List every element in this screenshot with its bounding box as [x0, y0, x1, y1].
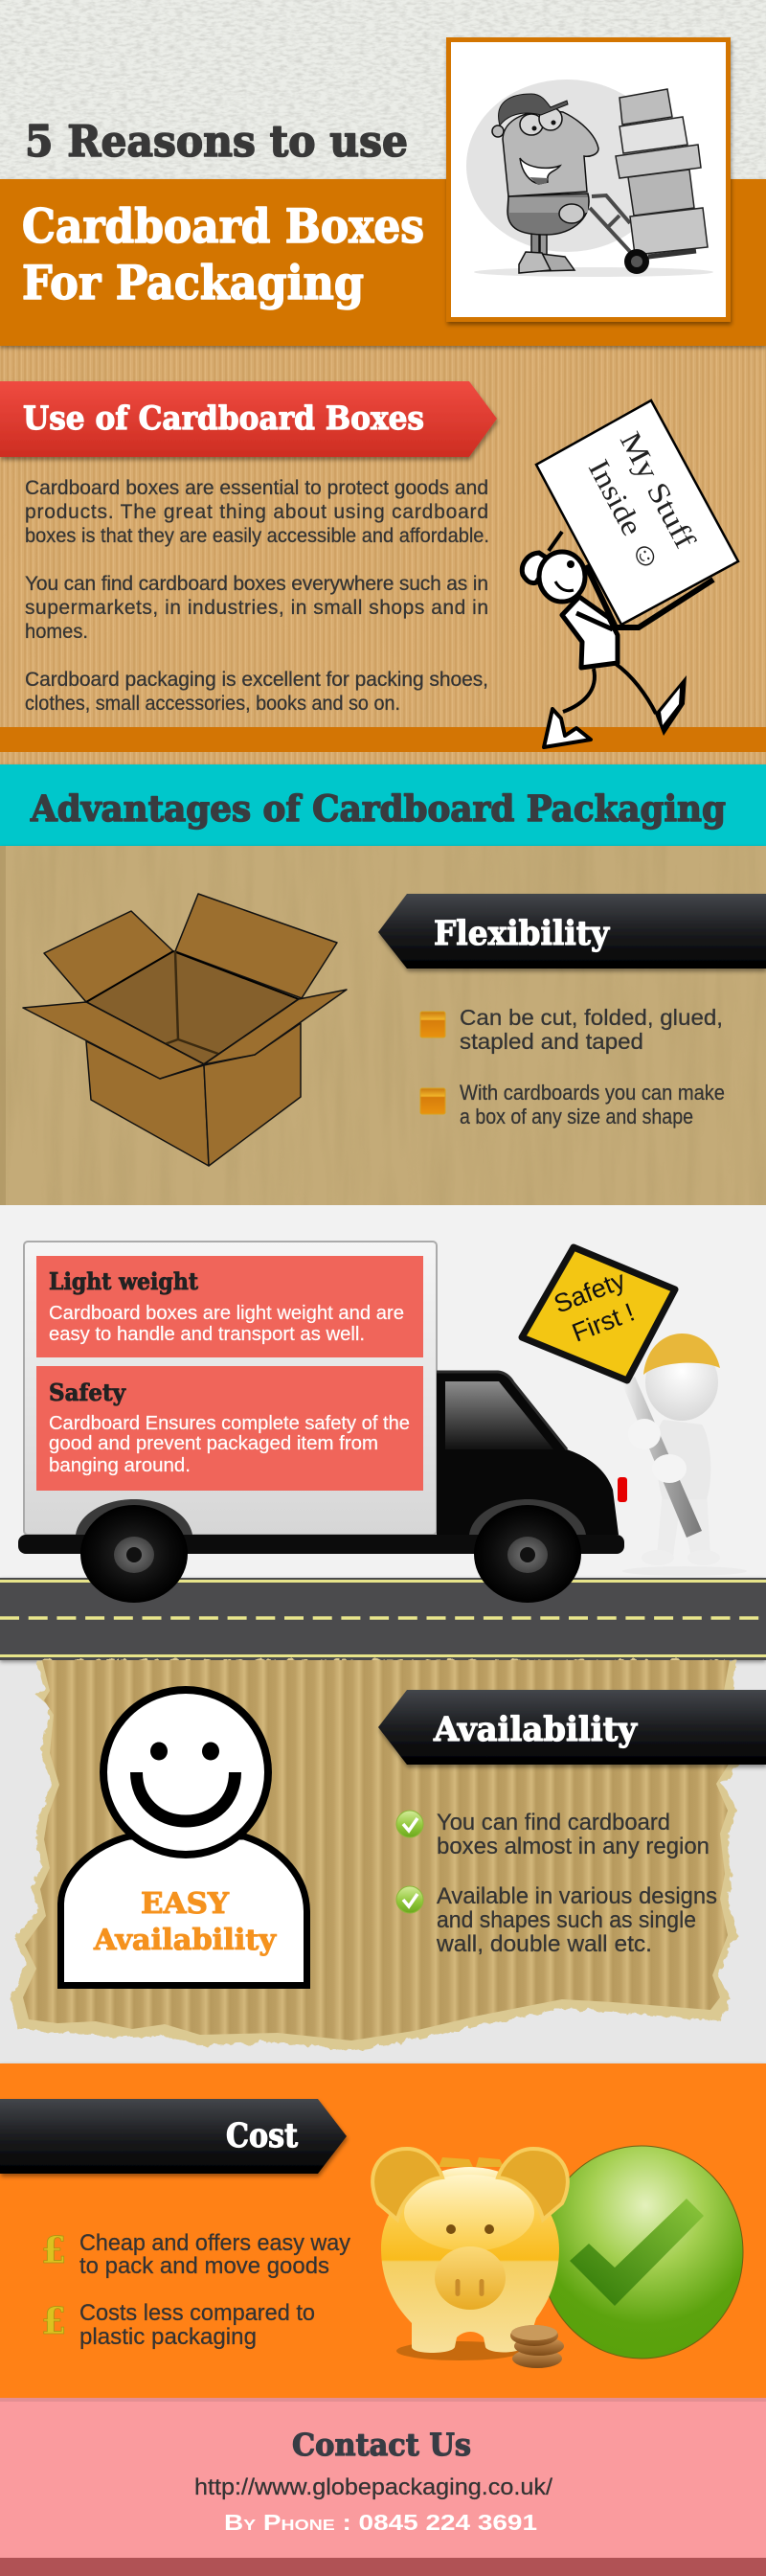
text: availability bullet two: wall, double wall etc. [436, 1931, 652, 1957]
left leg [563, 669, 595, 712]
floor shadow [622, 1566, 747, 1576]
illustration: worker holding safety sign [522, 1247, 747, 1576]
text: availability bullet one: You can find cardboard [437, 1810, 670, 1835]
banner: Advantages of Cardboard Packaging: Advantages of Cardboard Packaging [30, 787, 726, 830]
heading: Contact Us: Contact Us [292, 2427, 471, 2463]
floor shadow [474, 267, 713, 277]
picture: delivery man with hand truck [446, 37, 731, 322]
panel: header background [0, 0, 766, 182]
text: cost bullet two: Costs less compared to [79, 2300, 315, 2326]
text: flexibility bullet two: With cardboards you can make [460, 1081, 725, 1105]
panel: cost [0, 2063, 766, 2398]
panel: orange title band [0, 179, 766, 346]
text: cost bullet one: to pack and move goods [79, 2253, 329, 2279]
text: easy availability [93, 1887, 278, 1957]
card: safety: good and prevent packaged item from [49, 1433, 378, 1454]
illustration: delivery truck [18, 1242, 627, 1603]
pencil on cap [549, 532, 562, 551]
banner: Cost: Cost [226, 2116, 298, 2155]
legs [657, 1490, 710, 1557]
text: cost bullet two: plastic packaging [79, 2324, 257, 2350]
banner: Use of Cardboard Boxes [0, 381, 497, 457]
text block: use of cardboard boxes paragraphs: products. The great thing about using cardboard [25, 501, 488, 523]
torso [562, 597, 618, 668]
heading: Cardboard Boxes For Packaging [22, 198, 424, 310]
feet [642, 1550, 720, 1565]
text: availability bullet one [437, 1810, 710, 1859]
cap [522, 553, 551, 583]
text: flexibility bullet two: a box of any size and shape [460, 1105, 693, 1128]
text: flexibility bullet one: Can be cut, folded, glued, [460, 1005, 723, 1030]
sign [522, 1247, 675, 1380]
sign: First ! [568, 1298, 639, 1348]
cargo box [24, 1242, 437, 1535]
panel: section use of cardboard boxes background [0, 346, 766, 767]
hand [559, 204, 584, 223]
text: flexibility bullet one [460, 1005, 723, 1054]
chassis [18, 1535, 624, 1554]
panel: torn cardboard sheet [11, 1660, 766, 2050]
icon: piggy bank [372, 2149, 568, 2360]
text: cost bullet one [79, 2230, 350, 2279]
card: safety: banging around. [49, 1455, 191, 1476]
tail light [618, 1477, 627, 1502]
text block: use of cardboard boxes paragraphs: Cardboard boxes are essential to protect goods and [25, 477, 488, 499]
card: safety: Cardboard Ensures complete safety of the [49, 1413, 410, 1434]
hands [628, 1419, 687, 1483]
stripe: orange floor [0, 727, 766, 752]
banner: Advantages of Cardboard Packaging [0, 764, 766, 846]
panel: grey availability background [0, 1660, 766, 2067]
text: availability bullet one: boxes almost in any region [437, 1834, 710, 1859]
icon: green check two [396, 1886, 423, 1913]
icon: pound bullet two: £ [41, 2299, 66, 2342]
card shadow [586, 565, 713, 627]
mouth [520, 158, 560, 184]
card with message [536, 400, 738, 625]
banner: Use of Cardboard Boxes: Use of Cardboard Boxes [23, 399, 424, 438]
text: easy availability: Availability [93, 1924, 278, 1957]
text: flexibility bullet one: stapled and taped [460, 1029, 643, 1054]
text: cost bullet one: Cheap and offers easy way [79, 2230, 350, 2256]
card with message: My Stuff [614, 426, 703, 555]
text: cost bullet two [79, 2300, 315, 2350]
icon: crate bullet [420, 1012, 445, 1037]
cab [437, 1372, 619, 1535]
cap [499, 94, 568, 125]
heading: Cardboard Boxes For Packaging: Cardboard Boxes [22, 198, 424, 254]
cab window [445, 1381, 553, 1449]
heading: Cardboard Boxes For Packaging: For Packaging [22, 255, 364, 310]
footer strip [0, 2558, 766, 2576]
sign: Safety [550, 1265, 630, 1319]
eyes [150, 1742, 219, 1761]
card: light weight: Light weight [49, 1267, 198, 1295]
banner: Cost [0, 2099, 347, 2174]
banner: Availability [378, 1690, 766, 1765]
text: website url: http://www.globepackaging.co.uk/ [194, 2474, 552, 2500]
icon: green check [396, 1811, 423, 1837]
illustration: stick figure carrying box [522, 400, 738, 747]
text block: use of cardboard boxes paragraphs: homes. [25, 621, 88, 643]
road [0, 1578, 766, 1660]
grey backdrop circle [466, 80, 667, 252]
panel: contact [0, 2398, 766, 2558]
card: safety [36, 1366, 423, 1491]
icon: coin stack [510, 2325, 564, 2368]
stacked boxes [616, 89, 708, 255]
head and torso [492, 125, 504, 137]
right leg [616, 664, 656, 714]
legs and shoes [519, 230, 574, 273]
text: easy availability: EASY [141, 1887, 230, 1921]
card: light weight: Cardboard boxes are light weight and are [49, 1303, 404, 1324]
banner: Flexibility: Flexibility [434, 914, 611, 953]
text: availability bullet two [436, 1883, 717, 1957]
text block: use of cardboard boxes paragraphs [25, 477, 489, 715]
card: light weight: easy to handle and transport as well. [49, 1324, 365, 1345]
head [539, 552, 585, 602]
wheel left [76, 1499, 192, 1603]
head [103, 1690, 268, 1855]
torso [656, 1420, 710, 1499]
figure: smiling person [61, 1690, 306, 1985]
eyes [520, 114, 543, 135]
text block: use of cardboard boxes paragraphs: Cardboard packaging is excellent for packing shoes, [25, 669, 488, 691]
icon: pound bullet: £ [41, 2228, 66, 2271]
pole [621, 1377, 702, 1538]
text block: use of cardboard boxes paragraphs: clothes, small accessories, books and so on. [25, 693, 400, 715]
hand truck [590, 195, 696, 257]
wheel right [469, 1499, 586, 1603]
illustration: open cardboard box [23, 894, 347, 1166]
smile [136, 1772, 236, 1821]
icon: green check ball [540, 2146, 743, 2359]
wheel [624, 249, 649, 274]
banner: Availability: Availability [433, 1710, 639, 1749]
text: availability bullet two: and shapes such as single [437, 1907, 696, 1933]
text: phone number: By Phone : 0845 224 3691 [224, 2510, 537, 2535]
text: availability bullet two: Available in various designs [437, 1883, 717, 1909]
panel: flexibility [0, 846, 766, 1205]
card: light weight [36, 1256, 423, 1357]
panel: truck section background [0, 1205, 766, 1660]
banner: Flexibility [378, 894, 766, 969]
torso [61, 1836, 306, 1985]
card with message: Inside ☺ [582, 454, 669, 578]
text block: use of cardboard boxes paragraphs: You can find cardboard boxes everywhere such as in [25, 573, 488, 595]
text block: use of cardboard boxes paragraphs: supermarkets, in industries, in small shops and in [25, 597, 488, 619]
text block: use of cardboard boxes paragraphs: boxes is that they are easily accessible and affordable. [25, 525, 489, 547]
pants [507, 194, 589, 235]
card: safety: Safety [49, 1379, 126, 1406]
heading: 5 Reasons to use: 5 Reasons to use [25, 116, 408, 167]
head [645, 1344, 718, 1421]
text: flexibility bullet two [460, 1081, 725, 1128]
icon: crate bullet two [420, 1088, 445, 1114]
helmet [643, 1334, 720, 1375]
